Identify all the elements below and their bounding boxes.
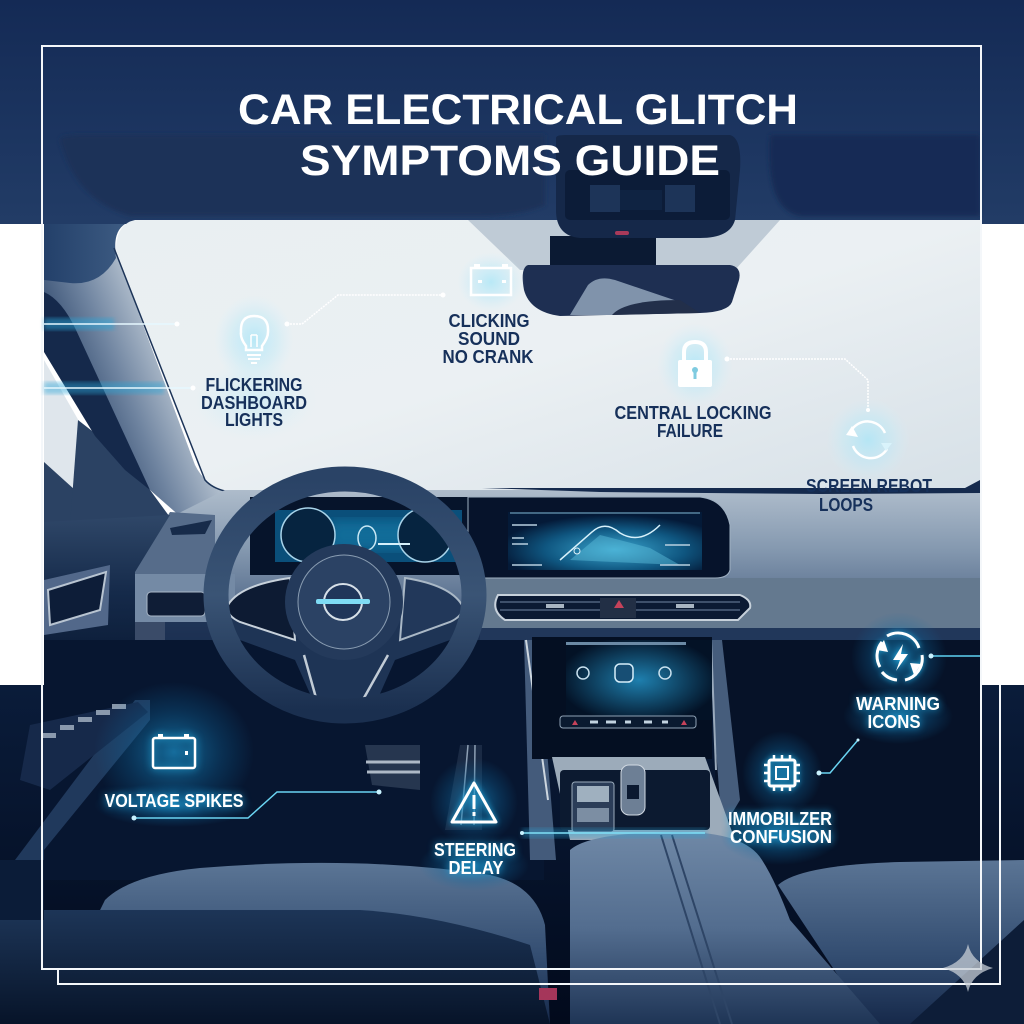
- icon: rearview mirror: [523, 265, 740, 316]
- title: CAR ELECTRICAL GLITCH: [238, 86, 798, 134]
- label: flickering dashboard lights: DASHBOARD: [201, 393, 307, 413]
- arrow: steering connector: [520, 828, 707, 838]
- panel: roof headliner band: [0, 0, 1024, 224]
- icon glows: [94, 252, 953, 891]
- label: clicking sound no crank: [442, 311, 534, 367]
- label: immobilizer confusion: CONFUSION: [730, 827, 832, 847]
- icon: microchip: [764, 755, 800, 791]
- label: central locking failure: FAILURE: [657, 421, 723, 441]
- label: steering delay: DELAY: [448, 858, 504, 878]
- panel: left side window: [44, 360, 80, 492]
- label: steering delay: [434, 840, 516, 878]
- label: clicking sound no crank: NO CRANK: [442, 347, 534, 367]
- panel: A pillar: [44, 224, 225, 530]
- icon: sparkle watermark: [943, 944, 993, 992]
- label: flickering dashboard lights: LIGHTS: [225, 410, 283, 430]
- arrow: warning connector: [928, 654, 980, 658]
- label: flickering dashboard lights: FLICKERING: [206, 375, 302, 395]
- chart: console touch screen: [560, 640, 712, 728]
- label: voltage spikes: VOLTAGE SPIKES: [104, 791, 244, 811]
- label: screen reboot loops: LOOPS: [819, 495, 873, 515]
- label: clicking sound no crank: CLICKING: [448, 311, 530, 331]
- icon: padlock: [678, 342, 712, 387]
- icon: warning triangle: [452, 783, 496, 822]
- chart: left gauge: [281, 508, 335, 562]
- label: central locking failure: CENTRAL LOCKING: [614, 403, 772, 423]
- icon: light bulb: [241, 316, 268, 363]
- panel: dashboard body: [44, 480, 980, 685]
- label: screen reboot loops: SCREEN REBOT: [806, 476, 932, 496]
- label: warning icons: ICONS: [868, 712, 920, 732]
- panel: rear armrest and seats: [0, 832, 1024, 1024]
- label: central locking failure: [614, 403, 772, 441]
- chart: right gauge: [398, 508, 452, 562]
- label: immobilizer confusion: [728, 809, 832, 847]
- title: [238, 86, 798, 185]
- panel: instrument cluster: [250, 497, 470, 575]
- label: clicking sound no crank: SOUND: [458, 329, 520, 349]
- arrow: voltage connector: [132, 790, 382, 820]
- arrow: connector lock to reboot: [724, 356, 870, 412]
- panel: centre console: [524, 637, 740, 860]
- panel: windshield: [116, 220, 980, 495]
- icon: reboot arrows: [846, 421, 892, 458]
- icon: pedals: [365, 745, 482, 830]
- arrow: connector bulb to battery: [284, 292, 446, 326]
- arrow: microchip connector: [816, 738, 860, 776]
- wheel logo glow: [316, 599, 370, 604]
- panel: mirror mount and sensor housing: [468, 135, 780, 270]
- icon: air vent with hazard button: [495, 595, 750, 620]
- label: warning icons: [856, 694, 940, 732]
- label: steering delay: STEERING: [434, 840, 516, 860]
- title: SYMPTOMS GUIDE: [300, 137, 720, 185]
- label: screen reboot loops: [806, 476, 932, 515]
- arrow: left pillar connector lines: [44, 318, 196, 394]
- label: warning icons: WARNING: [856, 694, 940, 714]
- panel: lower cabin dark band: [0, 685, 1024, 1024]
- panel: door-side glow wash: [94, 682, 254, 822]
- label: immobilizer confusion: IMMOBILZER: [728, 809, 832, 829]
- icon: battery light: [471, 264, 511, 295]
- icon: steering wheel: [216, 479, 474, 711]
- icon: battery dark: [153, 734, 195, 768]
- panel: lower interior and footwell: [0, 640, 980, 905]
- panel: central infotainment screen: [468, 497, 730, 578]
- icon: circular warning bolt: [877, 633, 922, 680]
- label: flickering dashboard lights: [201, 375, 307, 430]
